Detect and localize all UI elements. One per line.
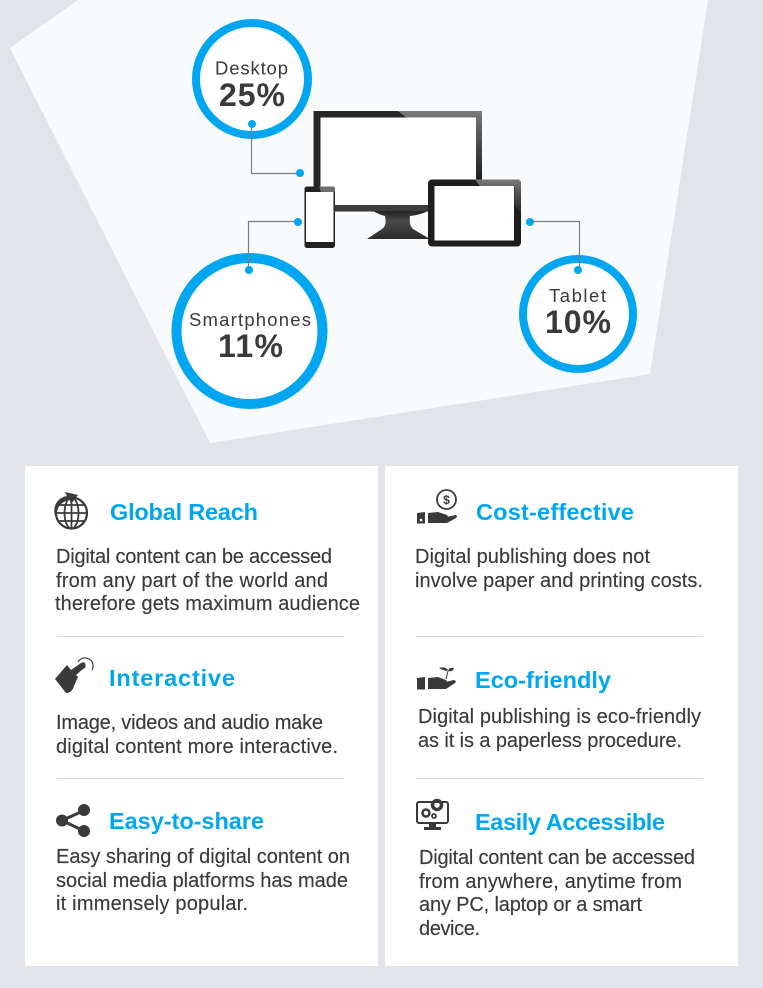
text: interactive description: Image, videos and audio make — [56, 712, 323, 734]
text: eco-friendly description — [418, 706, 701, 752]
text: easily accessible description — [419, 847, 695, 940]
icon: share nodes — [56, 804, 90, 837]
panel: right benefits — [385, 466, 738, 966]
text: eco-friendly description: Digital publishing is eco-friendly — [418, 706, 701, 728]
text: global reach description: therefore gets maximum audience — [55, 593, 360, 615]
block: interactive — [55, 658, 338, 758]
icon: hand holding coin — [417, 490, 457, 524]
text: cost-effective description — [415, 546, 703, 592]
text: interactive description — [56, 712, 338, 758]
icon: hand holding coin: $ — [443, 493, 450, 507]
block: cost-effective — [415, 490, 703, 592]
callout: smartphones 11% — [176, 218, 322, 404]
heading: cost-effective: Cost-effective — [476, 499, 634, 525]
callout: smartphones 11%: Smartphones — [189, 309, 311, 330]
heading: global reach: Global Reach — [110, 499, 258, 525]
text: easily accessible description: device. — [419, 918, 480, 940]
text: global reach description — [55, 546, 360, 615]
callout: smartphones 11%: 11% — [218, 328, 283, 364]
callout: tablet 10%: 10% — [545, 304, 611, 340]
icon: hand holding plant — [417, 667, 456, 690]
text: easy-to-share description: social media platforms has made — [56, 870, 348, 892]
heading: eco-friendly: Eco-friendly — [475, 667, 611, 693]
text: interactive description: digital content more interactive. — [56, 736, 338, 758]
heading: easy-to-share: Easy-to-share — [109, 808, 264, 834]
text: global reach description: Digital content can be accessed — [56, 546, 332, 568]
heading: interactive: Interactive — [109, 665, 235, 691]
icon: pointing hand — [55, 658, 93, 693]
text: easily accessible description: Digital content can be accessed — [419, 847, 695, 869]
text: easy-to-share description: Easy sharing of digital content on — [56, 846, 350, 868]
block: easily accessible — [417, 800, 695, 940]
text: easily accessible description: from anywhere, anytime from — [419, 871, 682, 893]
icon: monitor with gears — [417, 800, 448, 830]
icon: smartphone — [304, 186, 335, 248]
block: global reach — [54, 492, 360, 615]
icon: tablet — [428, 180, 521, 246]
block: easy-to-share — [56, 804, 350, 915]
block: eco-friendly — [417, 667, 701, 752]
icon: globe with arrow — [54, 492, 87, 528]
callout: desktop 25% — [196, 23, 308, 177]
callout: desktop 25%: Desktop — [215, 58, 288, 78]
panel: left benefits — [25, 466, 378, 966]
text: global reach description: from any part of the world and — [56, 570, 328, 592]
text: easy-to-share description — [56, 846, 350, 915]
top light polygon backdrop — [10, 0, 708, 443]
callout: desktop 25%: 25% — [219, 77, 285, 113]
callout: tablet 10%: Tablet — [549, 285, 606, 306]
device illustration — [304, 111, 521, 248]
heading: easily accessible: Easily Accessible — [475, 809, 665, 835]
text: cost-effective description: involve paper and printing costs. — [415, 570, 703, 592]
text: eco-friendly description: as it is a paperless procedure. — [418, 730, 682, 752]
text: easily accessible description: any PC, laptop or a smart — [419, 894, 642, 916]
icon: desktop monitor — [314, 111, 482, 239]
text: cost-effective description: Digital publishing does not — [415, 546, 650, 568]
text: easy-to-share description: it immensely popular. — [56, 893, 248, 915]
callout: tablet 10% — [523, 218, 633, 369]
